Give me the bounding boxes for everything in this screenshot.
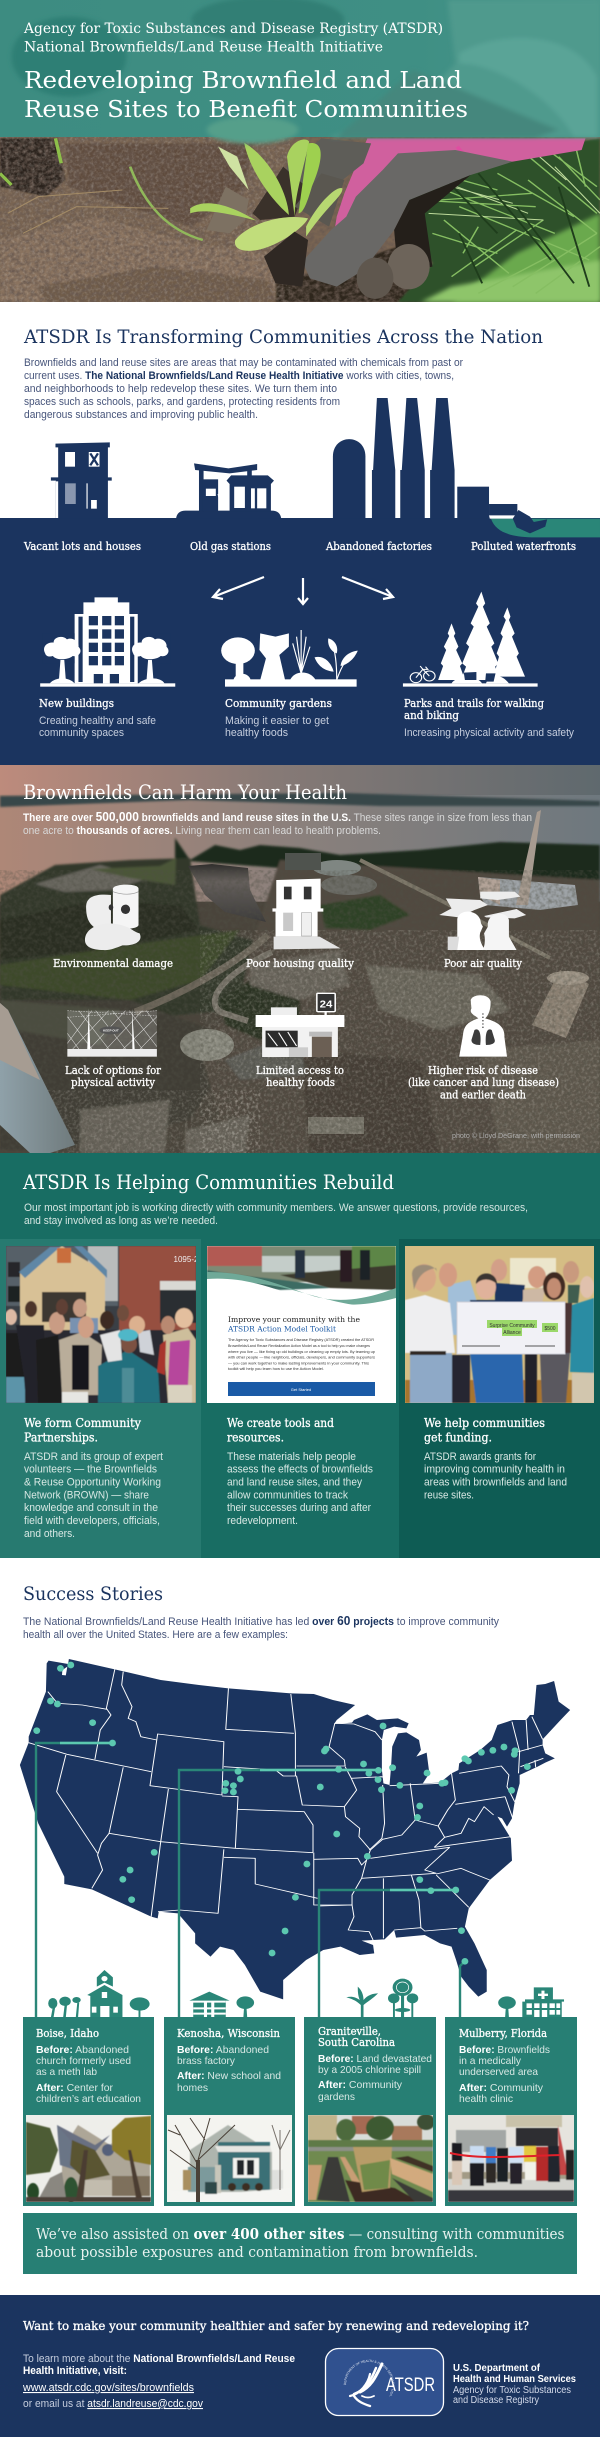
rebuild intro text: and stay involved as long as we’re needed.: [24, 1215, 218, 1227]
screenshot: action model toolkit: The Agency for Toxic Substances and Disease Registry (ATSDR) created the ATSDR: [228, 1338, 375, 1342]
caption: community gardens: Making it easier to get: [225, 715, 329, 727]
icon: smoke and people: [439, 892, 526, 950]
screenshot: action model toolkit: toolkit will help you learn how to use the Action Model.: [228, 1367, 324, 1371]
labels: row 2 harms: Limited access to: [256, 1064, 344, 1077]
rebuild intro text: [24, 1202, 528, 1227]
labels: row 2 harms: Higher risk of disease: [428, 1064, 538, 1077]
card: Graniteville, South Carolina: by a 2005 chlorine spill: [318, 2064, 421, 2076]
screenshot: action model toolkit: Improve your community with the: [228, 1315, 361, 1324]
column: community partnerships: field with developers, officials,: [24, 1515, 160, 1527]
column: funding: get funding.: [424, 1430, 492, 1444]
card: Mulberry, Florida: underserved area: [459, 2066, 538, 2078]
brownfield site labels: Polluted waterfronts: [471, 540, 576, 553]
labels: row 1 harms: Poor air quality: [444, 957, 523, 970]
callout: over 400 other sites: We’ve also assisted on over 400 other sites — consulting with communities: [36, 2226, 564, 2243]
caption: community gardens: healthy foods: [225, 727, 288, 739]
card: Mulberry, Florida: in a medically: [459, 2055, 522, 2067]
card: Mulberry, Florida: [445, 2017, 577, 2206]
icon: convenience store: 24: [320, 999, 332, 1010]
contact text: or email us at atsdr.landreuse@cdc.gov: [23, 2398, 203, 2410]
caption: new buildings: community spaces: [39, 727, 124, 739]
brownfield site labels: Vacant lots and houses: [23, 540, 141, 553]
arrows: [213, 577, 393, 604]
photo: rebuilt teal house: [167, 2115, 292, 2202]
harm intro text: There are over 500,000 brownfields and land reuse sites in the U.S. These sites range in size from less than: [23, 809, 532, 824]
card: Boise, Idaho: After: Center for: [36, 2082, 113, 2094]
brownfield site labels: Old gas stations: [190, 540, 271, 553]
photo: grant check presentation: [405, 1246, 594, 1403]
brownfield site labels: Abandoned factories: [325, 540, 432, 553]
initiative name: [24, 22, 442, 52]
column: community partnerships: ATSDR and its group of expert: [24, 1451, 163, 1463]
caption: community gardens: [225, 697, 332, 739]
rebuild intro text: Our most important job is working directly with community members. We answer questions, provide resources,: [24, 1202, 528, 1214]
heading: success stories: Success Stories: [23, 1583, 163, 1605]
icon: palms, church and plant: [48, 1970, 150, 2017]
caption: parks and trails: [404, 697, 574, 739]
card: Kenosha, Wisconsin: Before: Abandoned: [177, 2044, 269, 2056]
icon: parks and trails: [403, 592, 538, 687]
card: Mulberry, Florida: health clinic: [459, 2093, 513, 2105]
photo: renovated church: [26, 2115, 151, 2203]
column backgrounds: [0, 1239, 600, 1558]
screenshot: action model toolkit: with other people — like neighbors, officials, developers, and community supporters: [228, 1356, 375, 1360]
logo: ATSDR: [324, 2348, 444, 2416]
card: Mulberry, Florida: Before: Brownfields: [459, 2044, 550, 2056]
heading: transforming communities: ATSDR Is Transforming Communities Across the Nation: [23, 326, 543, 348]
logo: ATSDR: DEPARTMENT OF HEALTH & HUMAN SERVICES · USA ·: [344, 2360, 394, 2397]
caption: new buildings: Creating healthy and safe: [39, 715, 156, 727]
icon: person with lungs: [459, 995, 507, 1057]
logo: ATSDR: ATSDR: [386, 2375, 435, 2396]
column: tools and resources: redevelopment.: [227, 1515, 298, 1527]
callout: over 400 other sites: about possible exposures and contamination from brownfields.: [36, 2245, 478, 2261]
icon: community gardens: [221, 630, 358, 687]
success stories intro: [23, 1614, 499, 1641]
card: Graniteville, South Carolina: South Carolina: [318, 2036, 395, 2049]
intro text: Brownfields and land reuse sites are areas that may be contaminated with chemicals from past or: [24, 357, 463, 369]
column: tools and resources: allow communities to track: [227, 1490, 348, 1502]
icon: new buildings: [40, 597, 175, 687]
aerial photo of brownfield site: [0, 765, 600, 1153]
contact text: Health Initiative, visit:: [23, 2365, 127, 2377]
main title: Redeveloping Brownfield and Land: [24, 68, 462, 94]
card: Boise, Idaho: as a meth lab: [36, 2066, 97, 2078]
icon: chain-link fence: KEEP OUT: [103, 1029, 119, 1032]
card: Kenosha, Wisconsin: Kenosha, Wisconsin: [177, 2027, 280, 2040]
caption: community gardens: Community gardens: [225, 697, 332, 710]
main title: Reuse Sites to Benefit Communities: [24, 97, 468, 123]
column: tools and resources: assess the effects of brownfields: [227, 1464, 373, 1476]
agency name: and Disease Registry: [453, 2395, 539, 2406]
column: funding: [424, 1416, 567, 1502]
photo: ribbon cutting: [448, 2115, 574, 2202]
column: tools and resources: their successes during and after: [227, 1502, 371, 1514]
labels: row 2 harms: and earlier death: [440, 1088, 526, 1102]
screenshot: action model toolkit: Brownfields/Land Reuse Revitalization Action Model as a tool to help you make changes: [228, 1344, 370, 1348]
card: Kenosha, Wisconsin: brass factory: [177, 2055, 236, 2067]
intro text: spaces such as schools, parks, and gardens, protecting residents from: [24, 396, 340, 408]
card: Boise, Idaho: Before: Abandoned: [36, 2044, 129, 2056]
column: community partnerships: [24, 1416, 163, 1540]
caption: parks and trails: and biking: [404, 709, 459, 722]
column: community partnerships: Network (BROWN) — share: [24, 1490, 149, 1502]
harm intro text: one acre to thousands of acres. Living near them can lead to health problems.: [23, 825, 381, 837]
hero photo: soil, seedling and gloved hand: [0, 137, 600, 302]
intro text: [24, 357, 463, 421]
column: funding: We help communities: [424, 1416, 545, 1430]
icon: plant and sunflowers: [346, 1979, 418, 2017]
card: Graniteville, South Carolina: After: Community: [318, 2079, 403, 2091]
card: Mulberry, Florida: Mulberry, Florida: [459, 2027, 547, 2040]
labels: row 1 harms: Environmental damage: [53, 957, 173, 970]
map site markers: [33, 1662, 531, 1965]
panel: success stories: [20, 1583, 577, 2274]
icon: house and tree: [189, 1992, 254, 2017]
photo: community partners at building: [5, 1246, 199, 1403]
column: funding: improving community health in: [424, 1464, 565, 1476]
panel: hero header: [0, 0, 600, 302]
teal section background: [0, 1153, 600, 1558]
screenshot: action model toolkit: — you can work together to make lasting improvements in your community. This: [228, 1362, 369, 1366]
icon: abandoned factory: [333, 398, 517, 519]
labels: row 2 harms: [65, 1064, 559, 1102]
card: Boise, Idaho: Boise, Idaho: [36, 2027, 99, 2040]
panel: transforming communities: [0, 326, 600, 765]
labels: row 1 harms: [53, 957, 523, 970]
icon: old gas station: [176, 463, 281, 519]
intro text: and neighborhoods to help redevelop these sites. We turn them into: [24, 383, 337, 395]
column: tools and resources: We create tools and: [227, 1416, 334, 1430]
column: community partnerships: Partnerships.: [24, 1430, 98, 1444]
teal title band: [0, 0, 600, 143]
column: tools and resources: [227, 1416, 373, 1527]
card: Graniteville, South Carolina: gardens: [318, 2091, 355, 2103]
intro text: current uses. The National Brownfields/Land Reuse Health Initiative works with cities, towns,: [24, 370, 454, 382]
column: community partnerships: and others.: [24, 1528, 75, 1540]
labels: row 1 harms: Poor housing quality: [246, 957, 355, 970]
card: Boise, Idaho: children’s art education: [36, 2093, 141, 2105]
labels: row 2 harms: (like cancer and lung disease): [408, 1076, 559, 1089]
column: funding: areas with brownfields and land: [424, 1476, 567, 1488]
connector lines from sites to story cards: [36, 1743, 465, 2017]
icon: tree and clinic: [498, 1987, 564, 2017]
icon: chain-link fence: [67, 1008, 157, 1057]
footer question: Want to make your community healthier and safer by renewing and redeveloping it?: [23, 2319, 529, 2333]
column: tools and resources: resources.: [227, 1430, 284, 1444]
card: Graniteville, South Carolina: [304, 2017, 436, 2206]
card: Boise, Idaho: church formerly used: [36, 2055, 131, 2067]
card: Mulberry, Florida: After: Community: [459, 2082, 544, 2094]
icon: barrels and spill: [85, 885, 141, 950]
screenshot: action model toolkit: ATSDR Action Model Toolkit: [227, 1324, 336, 1334]
agency name: Health and Human Services: [453, 2374, 576, 2385]
photo: grant check presentation: $500: [544, 1326, 556, 1332]
column: community partnerships: knowledge and consult in the: [24, 1502, 158, 1514]
harm intro text: [23, 809, 532, 837]
caption: new buildings: [39, 697, 156, 739]
screenshot: action model toolkit: [207, 1246, 396, 1403]
panel: footer call to action: [0, 2295, 600, 2437]
column: tools and resources: These materials help people: [227, 1451, 356, 1463]
agency name: Agency for Toxic Substances: [453, 2385, 571, 2396]
column: funding: ATSDR awards grants for: [424, 1451, 536, 1463]
card: Kenosha, Wisconsin: homes: [177, 2082, 208, 2094]
column: funding: reuse sites.: [424, 1490, 474, 1502]
photo credit: photo © Lloyd DeGrane, with permission: [452, 1132, 580, 1140]
success stories intro: health all over the United States. Here are a few examples:: [23, 1629, 288, 1641]
column: community partnerships: We form Community: [24, 1416, 141, 1430]
contact text: To learn more about the National Brownfields/Land Reuse: [23, 2353, 295, 2365]
labels: row 2 harms: Lack of options for: [65, 1064, 162, 1077]
icon: convenience store: [256, 993, 344, 1057]
card: Graniteville, South Carolina: Graniteville,: [318, 2025, 381, 2038]
contact text: [22, 2353, 295, 2410]
success stories intro: The National Brownfields/Land Reuse Health Initiative has led over 60 projects to improve community: [23, 1614, 499, 1628]
caption: parks and trails: Increasing physical activity and safety: [404, 727, 574, 739]
caption: parks and trails: Parks and trails for walking: [404, 697, 544, 710]
screenshot: action model toolkit: where you live — like fixing up old buildings or cleaning up empty lots. By teaming up: [228, 1350, 375, 1354]
navy ground band: [0, 518, 600, 765]
initiative name: National Brownfields/Land Reuse Health Initiative: [24, 40, 383, 56]
card: Boise, Idaho: [23, 2017, 154, 2206]
contact text: www.atsdr.cdc.gov/sites/brownfields: [22, 2382, 194, 2394]
intro text: dangerous substances and improving public health.: [24, 409, 258, 421]
card: Kenosha, Wisconsin: [164, 2017, 295, 2206]
navy footer background: [0, 2295, 600, 2437]
card: Kenosha, Wisconsin: After: New school and: [177, 2070, 281, 2082]
labels: row 2 harms: healthy foods: [266, 1076, 335, 1089]
card: Graniteville, South Carolina: Before: Land devastated: [318, 2053, 432, 2065]
panel: helping communities rebuild: [0, 1153, 600, 1558]
panel: brownfields harm health: [0, 765, 600, 1153]
icon: vacant house: [51, 442, 112, 519]
labels: row 2 harms: physical activity: [71, 1076, 156, 1089]
photo: raised garden beds: [308, 2114, 435, 2202]
brownfield site labels: [23, 540, 576, 553]
column: tools and resources: and land reuse sites, and they: [227, 1476, 362, 1488]
initiative name: Agency for Toxic Substances and Disease Registry (ATSDR): [23, 21, 443, 37]
agency name: U.S. Department of: [453, 2363, 541, 2374]
heading: helping communities: ATSDR Is Helping Communities Rebuild: [22, 1170, 394, 1194]
map of United States: [20, 1659, 570, 1999]
agency name: [453, 2363, 576, 2406]
callout: over 400 other sites: [23, 2213, 577, 2274]
icon: polluted waterfront: [489, 510, 600, 537]
photo: grant check presentation: Alliance: [503, 1330, 521, 1336]
column: community partnerships: volunteers — the Brownfields: [24, 1464, 157, 1476]
caption: new buildings: New buildings: [39, 697, 114, 710]
heading: brownfields harm health: Brownfields Can Harm Your Health: [23, 780, 347, 804]
column: community partnerships: & Reuse Opportunity Working: [24, 1476, 161, 1488]
screenshot: action model toolkit: Get Started: [291, 1387, 311, 1392]
main title: [25, 70, 467, 118]
icon: run-down house: [272, 879, 341, 949]
photo: community partners at building: 1095-2: [174, 1255, 199, 1264]
photo: grant check presentation: Surprise Community: [489, 1323, 535, 1329]
